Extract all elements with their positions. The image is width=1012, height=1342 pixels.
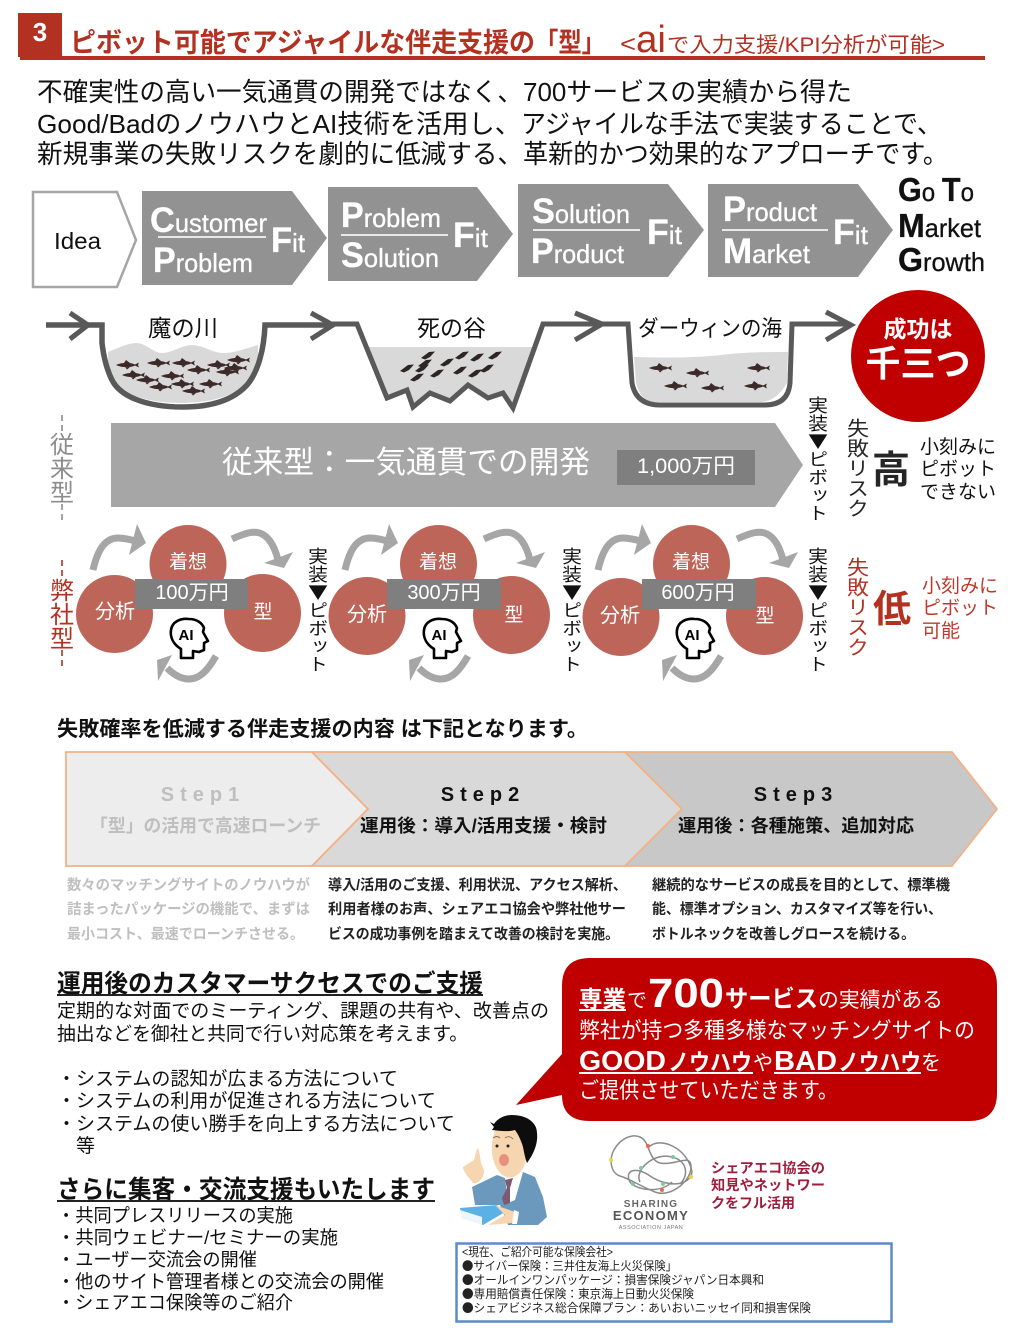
note: 小刻みにピボット可能: 可能 [922,620,960,642]
logo: Sharing Economy Association Japan: SHARING [624,1199,678,1210]
speech bubble [516,958,997,1121]
step 2 description: ビスの成功事例を踏まえて改善の検討を実施。 [328,925,619,943]
vertical: 失敗リスク 低 [842,557,911,657]
speech bubble: の実績がある [818,989,943,1012]
speech bubble: ご提供させていただきます。 [579,1078,838,1103]
speech bubble: ノウハウ [668,1049,752,1075]
chevron: Product Market Fit: Product [723,190,818,229]
insurance companies box [456,1244,892,1322]
label: 従来型: 従来型 [44,432,80,504]
step 1 description: 最小コスト、最速でローンチさせる。 [67,926,304,943]
chevron: Customer Problem Fit: Customer [150,201,267,240]
note: 小刻みにピボット可能: ピボット [922,597,998,619]
title: で入力支援/KPI分析が可能> [667,34,945,57]
step 3 description: 継続的なサービスの成長を目的として、標準機 [652,876,950,894]
chevron: Solution Product Fit: Product [531,232,625,271]
speech bubble: を [921,1052,941,1075]
vertical: 失敗リスク 高 [842,418,910,518]
vertical: 実装 ピボット 3: 実装▼ピボット [804,547,832,673]
vertical: 実装 ピボット (top): 実装▼ピボット [804,396,832,522]
red circle: 成功は千三つ [851,290,985,422]
step 1 chevron: 「型」の活用で高速ローンチ [90,816,321,836]
step 3 chevron: Step3 [754,784,838,806]
logo: Sharing Economy Association Japan: ASSOCIATION JAPAN [619,1225,683,1231]
title: ai [636,19,666,61]
insurance companies box: <現在、ご紹介可能な保険会社> [462,1244,613,1259]
speech bubble: BAD [774,1045,837,1076]
chevron: Problem Solution Fit: Problem [341,196,441,235]
text: シェアエコ協会: 知見やネットワー [711,1177,825,1193]
cycle 3: 600万円: AI [684,627,700,644]
vertical: 実装 ピボット 2: 実装▼ピボット [558,547,586,673]
chevron: Solution Product Fit: Fit [647,213,683,252]
intro paragraph: 新規事業の失敗リスクを劇的に低減する、 [37,139,523,169]
intro paragraph: アジャイルな手法で実装することで、 [521,109,942,139]
chevron: Product Market Fit: Market [723,232,811,271]
step 2 description [328,876,627,943]
cycle 2: 300万円: 300万円 [407,582,481,604]
chevron: Customer Problem Fit: Problem [153,241,253,280]
body: 対面ミーティング説明: 抽出などを御社と共同で行い対応策を考えます。 [57,1023,468,1045]
text: シェアエコ協会: シェアエコ協会の [711,1160,825,1176]
heading: 伴走支援の内容: 失敗確率を低減する伴走支援の内容 は下記となります。 [57,717,588,741]
speech bubble: サービス [725,986,818,1013]
step 3 chevron: 運用後：各種施策、追加対応 [678,815,914,836]
logo: Sharing Economy Association Japan: ECONOMY [613,1208,689,1223]
body: 対面ミーティング説明 [57,1000,549,1045]
body: 対面ミーティング説明: 定期的な対面でのミーティング、課題の共有や、改善点の [57,1000,549,1022]
intro paragraph: Good/BadのノウハウとAI技術を活用し、 [37,109,521,139]
list: 集客・交流施策: ・ユーザー交流会の開催 [57,1249,257,1270]
logo: Sharing Economy Association Japan [609,1136,693,1231]
red circle: 成功は千三つ: 千三つ [866,343,970,384]
chevron: Idea: Idea [54,228,101,254]
step 2 chevron [312,752,682,866]
big arrow: 従来型 一気通貫 [111,423,803,507]
big arrow: 従来型 一気通貫: 従来型：一気通貫での開発 [222,445,590,480]
pot: ダーウィンの海: ダーウィンの海 [638,316,782,341]
red circle: 成功は千三つ: 成功は [884,316,952,342]
chevron: Problem Solution Fit: Solution [341,236,439,275]
title: 「型」 [535,28,605,58]
pot: 死の谷 [332,313,602,408]
speech bubble: 専業 [579,986,626,1012]
heading: カスタマーサクセス支援: 運用後のカスタマーサクセスでのご支援 [57,969,483,998]
list: システム改善: ・システムの認知が広まる方法について [57,1068,398,1090]
list: システム改善: ・システムの使い勝手を向上する方法について [57,1113,455,1135]
step 3 description: 能、標準オプション、カスタマイズ等を行い、 [652,900,942,918]
list: システム改善 [57,1068,455,1157]
list: システム改善: 等 [76,1135,95,1157]
cycle 3: 600万円: 分析 [600,604,640,627]
vertical: 失敗リスク 高: 高 [872,450,910,492]
chevron: Problem Solution Fit: Fit [453,216,489,255]
step 1 chevron: Step1 [161,784,245,806]
vertical: 実装 ピボット 1: 実装▼ピボット [304,547,332,673]
cycle 2: 300万円: AI [432,627,446,644]
speech bubble: GOOD [579,1045,666,1076]
insurance companies box: ●オールインワンパッケージ：損害保険ジャパン日本興和 [462,1271,764,1288]
chevron: Customer Problem Fit [142,191,327,285]
vertical: 失敗リスク 高: 失敗リスク [842,418,874,518]
cycle 3: 600万円: 着想 [672,551,710,573]
Go To Market Growth label: Market [898,207,982,244]
step 1 description [67,876,310,943]
note: 小刻みにピボットできない: できない [920,482,996,503]
title: ピボット可能でアジャイルな伴走支援の [70,28,535,58]
step 3 description [652,876,950,943]
chevron: Product Market Fit: Fit [833,213,869,252]
note: 小刻みにピボットできない: 小刻みに [920,436,996,458]
label: 従来型 [44,415,80,523]
vertical: 失敗リスク 低: 失敗リスク [842,557,874,657]
heading: 集客・交流支援: さらに集客・交流支援もいたします [57,1176,435,1204]
cycle 2: 300万円 [328,524,550,681]
step 1 description: 詰まったパッケージの機能で、まずは [67,900,310,918]
cycle 2: 300万円: 型 [504,604,524,626]
list: システム改善: ・システムの利用が促進される方法について [57,1090,436,1112]
title: < [620,31,636,58]
cycle 1: 100万円: 100万円 [155,582,229,604]
list: 集客・交流施策 [57,1205,384,1313]
cycle 1: 100万円: 着想 [169,551,207,573]
insurance companies box: ●専用賠償責任保険：東京海上日動火災保険 [462,1285,694,1302]
list: 集客・交流施策: ・シェアエコ保険等のご紹介 [57,1292,293,1313]
intro paragraph: 革新的かつ効果的なアプローチです。 [523,139,948,169]
Go To Market Growth label: Go To [898,171,974,208]
intro paragraph: 不確実性の高い一気通貫の開発ではなく、 [37,77,523,107]
step 2 chevron: Step2 [441,784,525,806]
section number badge: 3 [33,17,47,47]
pot: 魔の川: 魔の川 [148,315,218,341]
Go To Market Growth label [898,171,985,278]
chevron: Solution Product Fit [518,184,704,277]
step 2 description: 利用者様のお声、シェアエコ協会や弊社他サー [328,900,626,918]
note: 小刻みにピボット可能 [922,575,998,642]
icon: businessman with book [460,1115,547,1225]
note: 小刻みにピボット可能: 小刻みに [922,575,998,597]
speech bubble: で [627,990,647,1012]
text: シェアエコ協会 [711,1160,825,1211]
speech bubble: や [753,1052,773,1075]
Go To Market Growth label: Growth [898,241,985,278]
chevron: Customer Problem Fit: Fit [271,221,306,260]
intro paragraph: 700サービスの実績から得た [523,77,852,107]
list: 集客・交流施策: ・他のサイト管理者様との交流会の開催 [57,1271,384,1292]
insurance companies box: ●シェアビジネス総合保障プラン：あいおいニッセイ同和損害保険 [462,1299,811,1316]
step 3 description: ボトルネックを改善しグロースを続ける。 [652,925,915,943]
cycle 1: 100万円: 分析 [95,600,135,623]
cycle 3: 600万円 [582,524,803,681]
step 1 description: 数々のマッチングサイトのノウハウが [67,876,310,894]
note: 小刻みにピボットできない: ピボット [920,458,996,480]
intro paragraph [37,77,948,169]
pot: 魔の川 [46,313,333,407]
section number badge [18,13,62,57]
list: 集客・交流施策: ・共同プレスリリースの実施 [57,1205,293,1226]
speech bubble: 弊社が持つ多種多様なマッチングサイトの [579,1018,975,1043]
step 2 description: 導入/活用のご支援、利用状況、アクセス解析、 [328,876,627,894]
chevron: Product Market Fit [708,184,893,277]
step 3 chevron [625,752,997,866]
cycle 1: 100万円 [76,524,301,681]
note: 小刻みにピボットできない [920,436,996,503]
chevron: Problem Solution Fit [328,187,513,281]
vertical: 失敗リスク 低: 低 [873,589,911,631]
pot: 死の谷: 死の谷 [417,315,486,341]
cycle 2: 300万円: 着想 [419,551,457,573]
label: 弊社型 [44,560,80,668]
step 1 chevron [66,752,368,866]
chevron: Idea [33,192,136,287]
speech bubble: ノウハウ [838,1049,921,1075]
list: 集客・交流施策: ・共同ウェビナー/セミナーの実施 [57,1227,338,1248]
title underline bar [20,56,985,60]
insurance companies box: ●サイバー保険：三井住友海上火災保険」 [462,1257,677,1274]
cycle 1: 100万円: AI [178,627,194,644]
speech bubble: 700 [648,970,724,1016]
big arrow: 従来型 一気通貫: 1,000万円 [637,455,735,478]
text: シェアエコ協会: クをフル活用 [711,1195,795,1211]
cycle 1: 100万円: 型 [253,601,273,623]
cycle 3: 600万円: 600万円 [661,582,735,604]
pot: ダーウィンの海 [600,312,851,405]
cycle 3: 600万円: 型 [755,605,775,627]
cycle 2: 300万円: 分析 [347,603,387,626]
label: 弊社型: 弊社型 [44,578,80,650]
chevron: Solution Product Fit: Solution [532,192,630,231]
step 2 chevron: 運用後：導入/活用支援・検討 [360,816,607,836]
title [70,19,945,61]
